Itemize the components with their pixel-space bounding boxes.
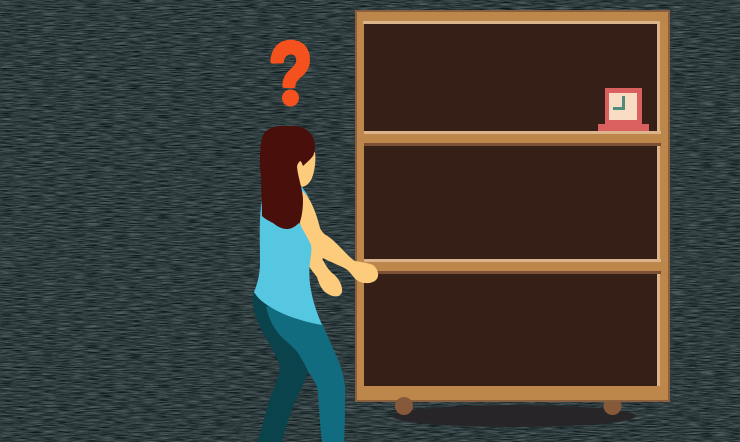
front arm xyxy=(300,190,378,283)
back arm xyxy=(309,250,342,296)
back leg xyxy=(253,293,308,442)
wheel: left xyxy=(395,397,413,415)
floor shadow xyxy=(392,405,636,427)
shelf board: upper xyxy=(364,131,661,146)
bookshelf xyxy=(355,10,670,402)
shelf board: lower xyxy=(364,259,661,274)
inner light trim xyxy=(363,21,660,386)
shelf interior xyxy=(364,24,657,386)
sleeveless top xyxy=(254,187,322,325)
hair xyxy=(260,126,315,229)
face xyxy=(296,152,315,187)
icon: question mark: ? xyxy=(269,24,312,123)
woman xyxy=(253,126,378,442)
icon: clock on shelf xyxy=(598,88,649,131)
wheel: right xyxy=(604,397,622,415)
icon: question mark xyxy=(270,40,310,106)
shelf frame xyxy=(355,10,670,402)
front leg xyxy=(266,306,345,442)
